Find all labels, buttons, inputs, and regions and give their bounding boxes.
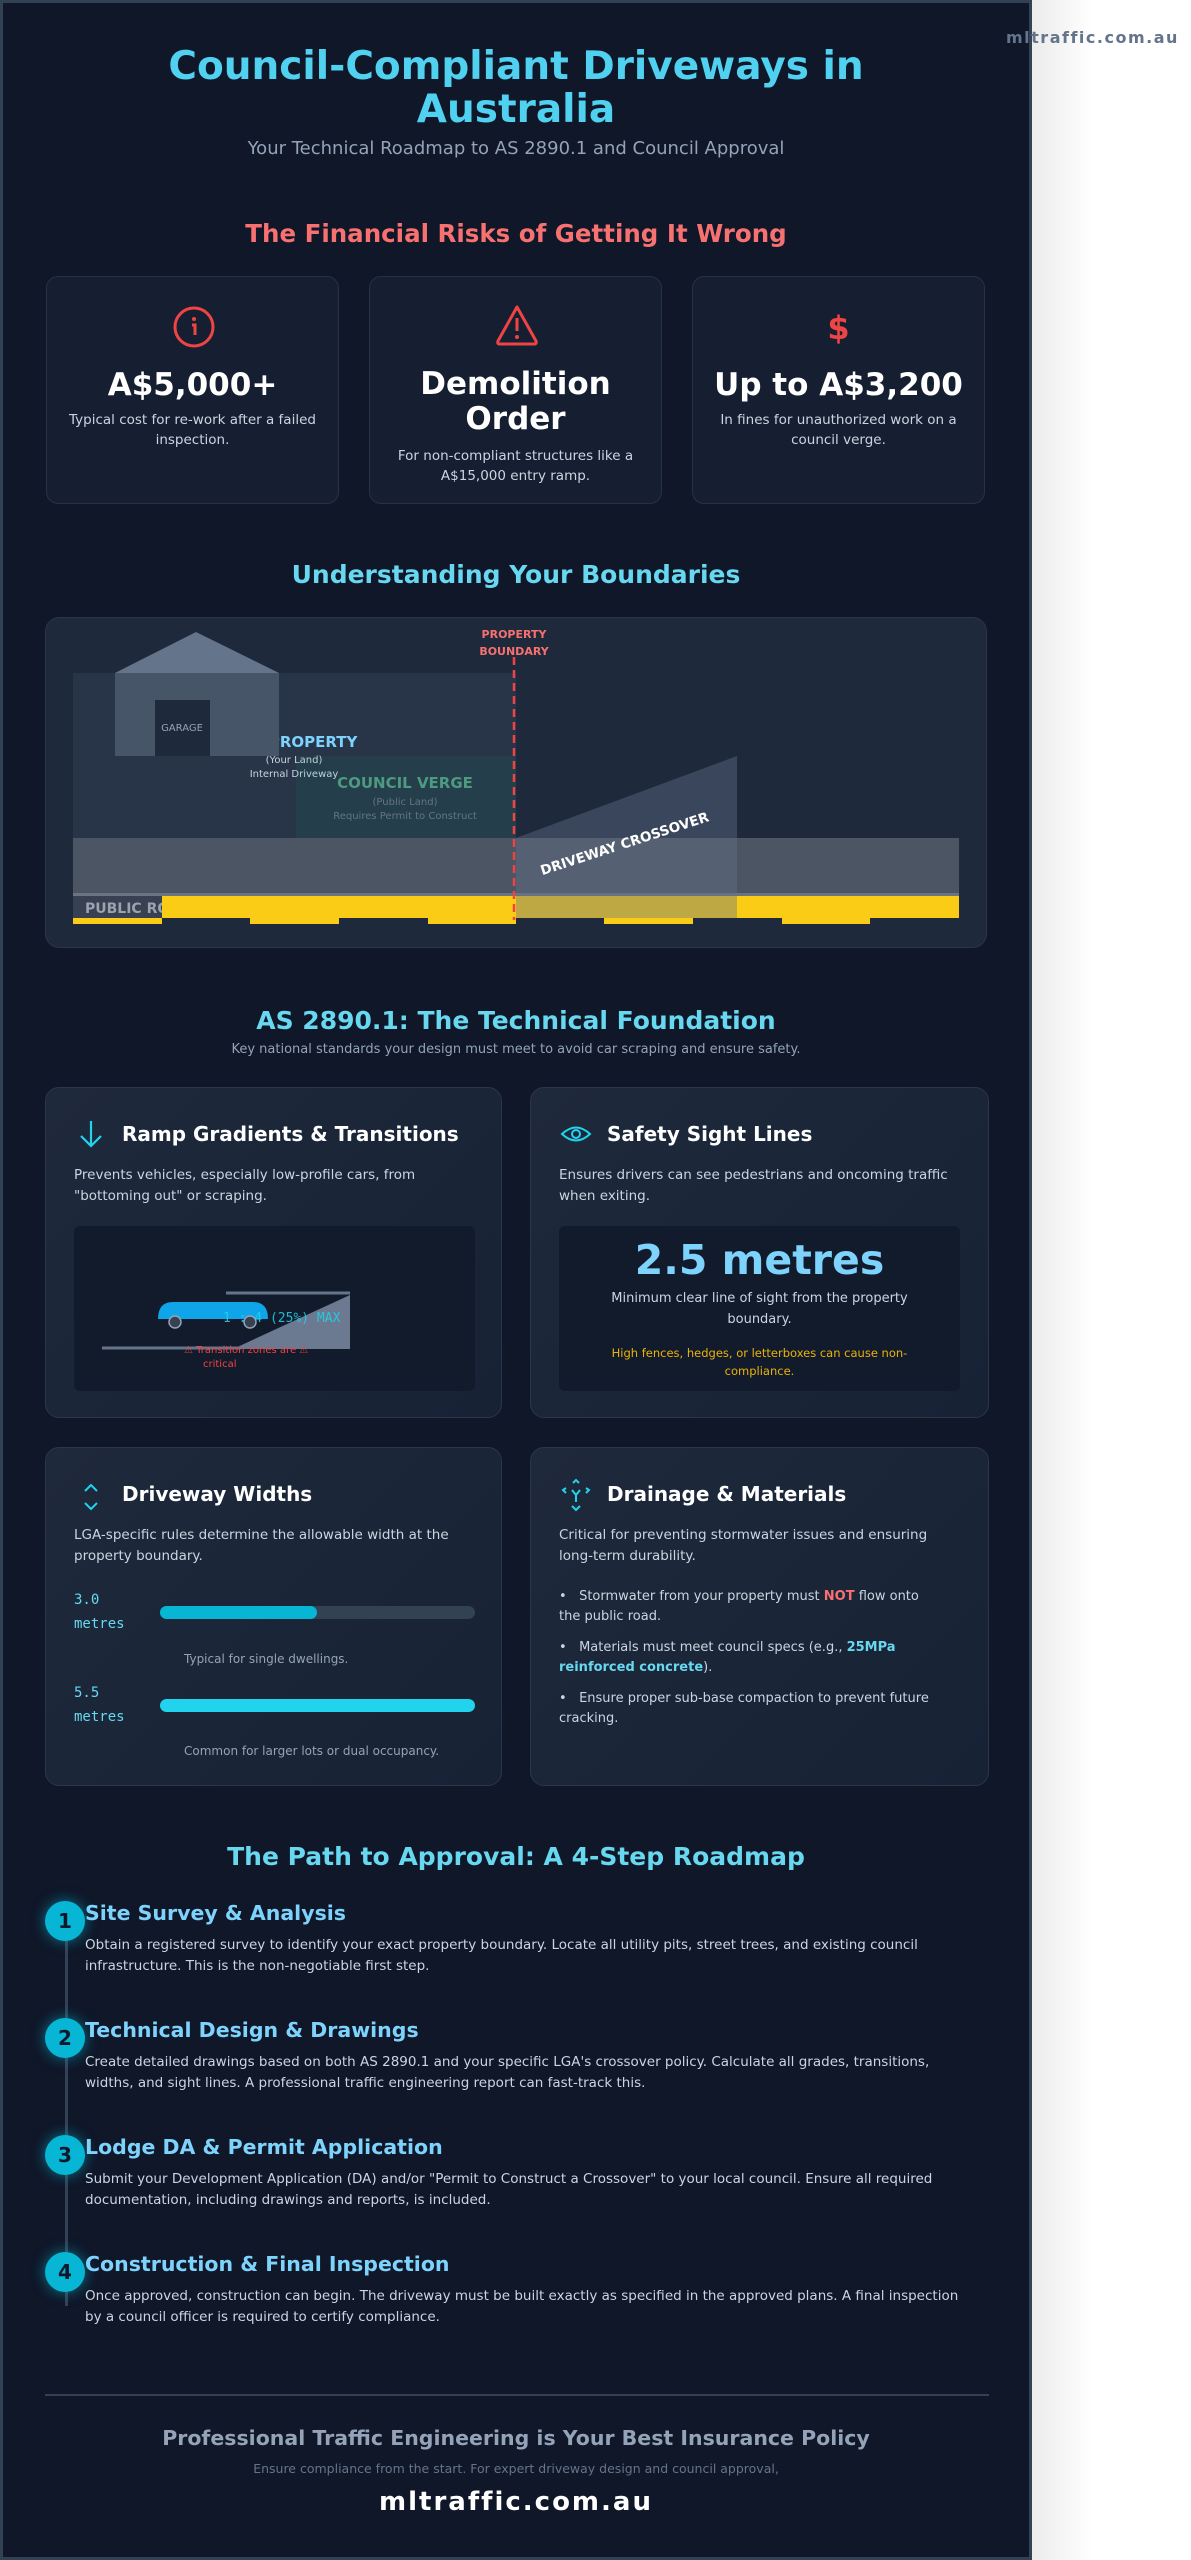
bullet list: • Stormwater from your property must NOT flow onto: [559, 1589, 919, 1604]
step 2: widths, and sight lines. A professional traffic engineering report can fast-track this.: [85, 2075, 645, 2091]
driveway crossover: [516, 756, 737, 918]
icon: expand: [84, 1484, 98, 1510]
icon: info circle: [174, 306, 214, 348]
watermark: mltraffic.com.au: [1006, 28, 1179, 47]
step 4: [37, 2244, 958, 2325]
card: driveway widths: [45, 1447, 502, 1786]
boundary diagram: [45, 617, 987, 948]
value: Order: [465, 401, 566, 437]
heading: roadmap: The Path to Approval: A 4-Step Roadmap: [227, 1842, 805, 1871]
description: A$15,000 entry ramp.: [441, 468, 590, 484]
title: Council-Compliant Driveways in: [168, 44, 864, 89]
council verge: [296, 756, 516, 838]
subtitle: Your Technical Roadmap to AS 2890.1 and Council Approval: [248, 138, 784, 159]
step 2: 2: [58, 2026, 72, 2050]
bullet list: the public road.: [559, 1609, 661, 1624]
subheading: Key national standards your design must meet to avoid car scraping and ensure safety.: [231, 1042, 801, 1057]
stat description: Minimum clear line of sight from the property: [611, 1291, 908, 1306]
bar: 5.5 metres: [74, 1685, 475, 1758]
step 3: 3: [58, 2143, 72, 2167]
ramp diagram: [74, 1226, 475, 1391]
house: GARAGE: [161, 723, 203, 734]
bar: 5.5 metres: Common for larger lots or dual occupancy.: [184, 1744, 439, 1758]
title: Australia: [417, 87, 615, 132]
bar: 3.0 metres: metres: [74, 1616, 125, 1632]
public road: PUBLIC ROAD: [85, 901, 191, 917]
stat box: [559, 1226, 960, 1391]
step 4: Once approved, construction can begin. The driveway must be built exactly as specified in the approved plans. A final inspection: [85, 2288, 958, 2304]
description: long-term durability.: [559, 1548, 696, 1564]
bar: 3.0 metres: Typical for single dwellings.: [184, 1652, 348, 1666]
stat description: [611, 1291, 908, 1327]
bar: 3.0 metres: [74, 1592, 475, 1666]
footer url: mltraffic.com.au: [379, 2487, 653, 2517]
step 3: [37, 2127, 932, 2208]
step 2: Create detailed drawings based on both AS 2890.1 and your specific LGA's crossover policy. Calculate all grades, transitions,: [85, 2054, 929, 2070]
bullet list: • Ensure proper sub-base compaction to prevent future: [559, 1691, 929, 1706]
heading: Driveway Widths: [122, 1482, 312, 1506]
warning: [612, 1346, 907, 1378]
council verge: (Public Land): [373, 797, 438, 808]
value: [420, 366, 611, 437]
title: [168, 44, 864, 132]
description: [720, 412, 957, 448]
step 1: Site Survey & Analysis: [85, 1901, 346, 1925]
value: A$5,000+: [108, 367, 277, 403]
heading: Ramp Gradients & Transitions: [122, 1122, 459, 1146]
stat value: 2.5 metres: [635, 1236, 884, 1284]
step 2: [37, 2010, 929, 2091]
card: ramp gradients: [45, 1087, 502, 1418]
icon: down arrow: [80, 1121, 102, 1148]
heading: Drainage & Materials: [607, 1482, 846, 1506]
card: safety sight lines: [530, 1087, 989, 1418]
property land: (Your Land): [266, 755, 322, 766]
description: In fines for unauthorized work on a: [720, 412, 957, 428]
value: Up to A$3,200: [714, 367, 963, 403]
step 4: 4: [58, 2260, 72, 2284]
heading: boundaries: Understanding Your Boundaries: [292, 560, 740, 589]
property boundary line: [479, 628, 550, 920]
bar: 5.5 metres: metres: [74, 1709, 125, 1725]
description: council verge.: [791, 432, 886, 448]
description: [74, 1167, 415, 1204]
bullet list: • Materials must meet council specs (e.g., 25MPa: [559, 1640, 896, 1655]
description: [559, 1527, 927, 1564]
property boundary line: PROPERTY: [482, 628, 547, 641]
description: LGA-specific rules determine the allowable width at the: [74, 1527, 449, 1543]
timeline line: [65, 1921, 68, 2306]
house: [115, 632, 279, 756]
step 1: 1: [58, 1909, 72, 1933]
description: Critical for preventing stormwater issues and ensuring: [559, 1527, 927, 1543]
heading: Safety Sight Lines: [607, 1122, 812, 1146]
card: demolition: [369, 276, 662, 504]
bullet list: [559, 1589, 929, 1726]
public road: [73, 838, 959, 924]
icon: dollar: $: [827, 309, 850, 347]
description: inspection.: [156, 432, 229, 448]
step 4: by a council officer is required to certify compliance.: [85, 2309, 440, 2325]
value: Demolition: [420, 366, 611, 402]
step 1: [37, 1893, 918, 1974]
warning: High fences, hedges, or letterboxes can cause non-: [612, 1346, 907, 1360]
step 3: Submit your Development Application (DA) and/or "Permit to Construct a Crossover" to your local council. Ensure all required: [85, 2171, 932, 2187]
icon: eye: [560, 1126, 592, 1142]
bullet list: reinforced concrete).: [559, 1660, 712, 1675]
description: when exiting.: [559, 1188, 650, 1204]
heading: AS 2890.1: AS 2890.1: The Technical Foundation: [256, 1006, 776, 1035]
footer text: Ensure compliance from the start. For expert driveway design and council approval,: [253, 2461, 779, 2476]
ramp diagram: ⚠ Transition zones are ⚠: [184, 1345, 308, 1356]
description: Prevents vehicles, especially low-profile cars, from: [74, 1167, 415, 1183]
property boundary line: BOUNDARY: [479, 645, 550, 658]
description: "bottoming out" or scraping.: [74, 1188, 267, 1204]
card: rework cost: [46, 276, 339, 504]
description: [559, 1167, 948, 1204]
step 4: Construction & Final Inspection: [85, 2252, 450, 2276]
icon: drainage: [562, 1478, 590, 1512]
ramp diagram: 1 : 4 (25%) MAX: [223, 1311, 341, 1326]
step 1: infrastructure. This is the non-negotiable first step.: [85, 1958, 429, 1974]
description: Ensures drivers can see pedestrians and oncoming traffic: [559, 1167, 948, 1183]
property land: THE PROPERTY: [231, 733, 359, 751]
description: For non-compliant structures like a: [398, 448, 633, 464]
warning: compliance.: [725, 1364, 794, 1378]
description: [68, 412, 316, 448]
council verge: Requires Permit to Construct: [333, 811, 477, 822]
description: [74, 1527, 449, 1564]
footer heading: Professional Traffic Engineering is Your Best Insurance Policy: [162, 2426, 870, 2450]
stat description: boundary.: [727, 1312, 792, 1327]
property land: [73, 673, 516, 838]
step 3: Lodge DA & Permit Application: [85, 2135, 443, 2159]
property land: Internal Driveway: [250, 769, 338, 780]
description: [398, 448, 633, 484]
bullet list: cracking.: [559, 1711, 618, 1726]
driveway crossover: DRIVEWAY CROSSOVER: [539, 809, 712, 879]
step 1: Obtain a registered survey to identify your exact property boundary. Locate all utility pits, street trees, and existing council: [85, 1937, 918, 1953]
card: drainage & materials: [530, 1447, 989, 1786]
heading: financial risks: The Financial Risks of Getting It Wrong: [245, 219, 787, 248]
step 2: Technical Design & Drawings: [85, 2018, 419, 2042]
council verge: COUNCIL VERGE: [337, 774, 473, 792]
bar: 5.5 metres: 5.5: [74, 1685, 99, 1701]
description: property boundary.: [74, 1548, 203, 1564]
ramp diagram: critical: [203, 1359, 236, 1370]
icon: warning triangle: [496, 305, 538, 346]
card: fines: [692, 276, 985, 504]
step 3: documentation, including drawings and reports, is included.: [85, 2192, 491, 2208]
bar: 3.0 metres: 3.0: [74, 1592, 99, 1608]
description: Typical cost for re-work after a failed: [69, 412, 316, 428]
